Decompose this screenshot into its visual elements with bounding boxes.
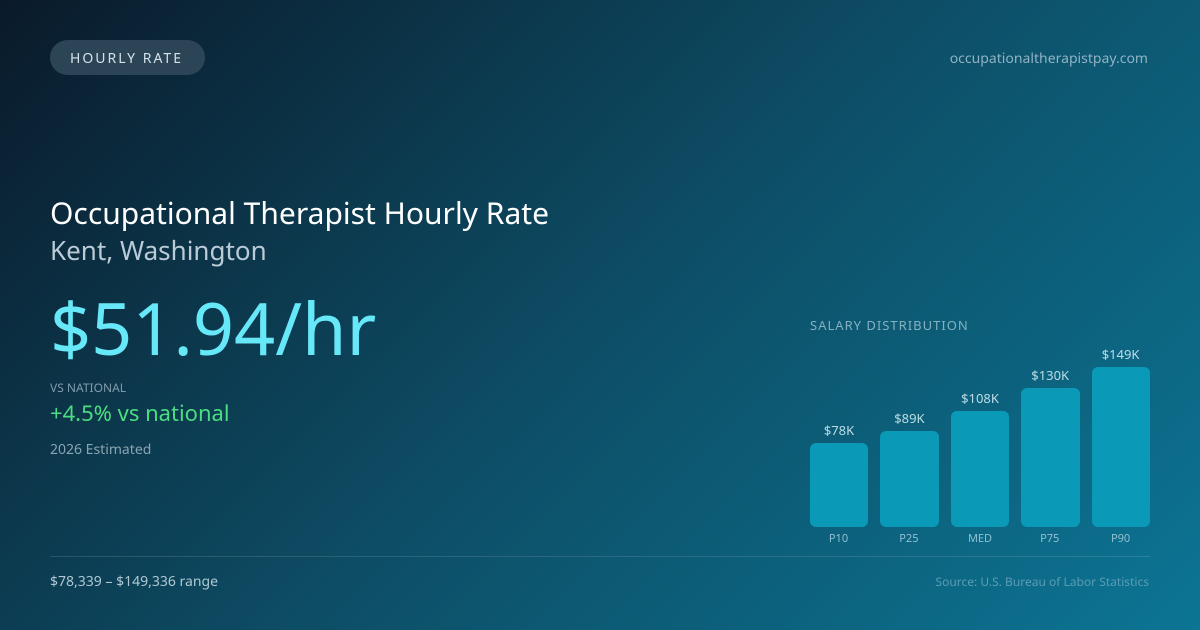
bar P90 — [1092, 367, 1150, 527]
title: Occupational Therapist Hourly Rate — [50, 192, 549, 233]
chart heading: SALARY DISTRIBUTION — [810, 316, 969, 334]
comparison label: VS NATIONAL — [50, 379, 126, 396]
badge: hourly rate — [50, 40, 205, 75]
bar P10 — [810, 443, 868, 527]
value median: $108K — [961, 389, 999, 407]
value P90: $149K — [1102, 345, 1139, 363]
main hourly rate figure: $51.94/hr — [50, 279, 376, 377]
label P25: P25 — [899, 531, 919, 546]
label P75: P75 — [1040, 531, 1059, 546]
label P90: P90 — [1111, 531, 1130, 546]
estimate note: 2026 Estimated — [50, 440, 151, 459]
salary range: $78,339 – $149,336 range — [50, 572, 218, 591]
value P25: $89K — [894, 409, 925, 427]
label median: MED — [968, 531, 992, 546]
value P10: $78K — [824, 421, 854, 439]
subtitle: location: Kent, Washington — [50, 232, 267, 268]
badge: hourly rate: HOURLY RATE — [70, 49, 183, 68]
bar P25 — [880, 431, 939, 527]
site domain: occupationaltherapistpay.com — [950, 49, 1148, 68]
label P10: P10 — [829, 531, 848, 546]
value P75: $130K — [1031, 366, 1069, 384]
bar P75 — [1021, 388, 1080, 527]
bar median — [951, 411, 1009, 527]
source note: Source: U.S. Bureau of Labor Statistics — [936, 573, 1149, 590]
comparison value: +4.5% vs national — [50, 398, 230, 428]
